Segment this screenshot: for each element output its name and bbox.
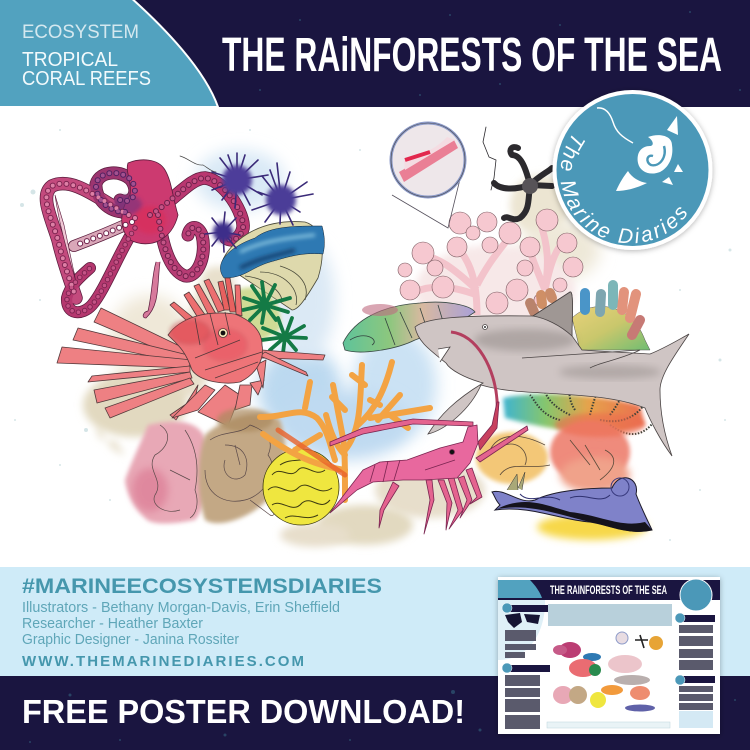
illustration: green anemones bbox=[236, 282, 306, 353]
tab text: ecosystem: ECOSYSTEM bbox=[22, 21, 139, 43]
light blue credits band bbox=[0, 567, 750, 677]
speckle texture bbox=[14, 129, 732, 541]
logo badge bbox=[549, 90, 716, 254]
credits: Researcher - Heather Baxter bbox=[22, 615, 203, 632]
bottom band bbox=[0, 676, 750, 750]
credits bbox=[22, 599, 340, 648]
illustration: giant clam bbox=[220, 222, 324, 310]
illustration: octopus bbox=[46, 160, 243, 318]
thumbnail world map bbox=[505, 613, 540, 628]
illustration: orange branch coral bbox=[260, 362, 430, 500]
illustration: coral polyp zoom inset bbox=[391, 123, 465, 228]
thumbnail tab bbox=[498, 580, 542, 598]
hashtag: #MARINEECOSYSTEMSDIARIES bbox=[22, 574, 382, 598]
poster thumbnail bbox=[498, 577, 720, 734]
logo badge: The Marine Diaries bbox=[560, 136, 687, 244]
illustration: yellow brain coral bbox=[263, 449, 339, 525]
thumbnail right text bbox=[679, 625, 713, 710]
thumbnail mini illustration bbox=[553, 632, 663, 712]
illustration: sea urchins bbox=[180, 153, 313, 252]
illustration: rainbow wash and feather star bbox=[503, 372, 655, 434]
logo manta icon bbox=[597, 108, 683, 191]
logo wordmark bbox=[560, 132, 696, 243]
illustration: pink lobster bbox=[330, 402, 528, 534]
thumbnail heading icons bbox=[502, 603, 685, 685]
thumbnail header bbox=[498, 580, 720, 600]
header corner tab bbox=[0, 0, 218, 107]
illustration: reef shark bbox=[415, 292, 689, 456]
illustration: watercolor washes bbox=[83, 150, 647, 547]
thumbnail left text bbox=[505, 630, 540, 729]
thumbnail intro text bbox=[548, 604, 672, 626]
illustration: sea slug nudibranch bbox=[492, 472, 652, 532]
thumbnail headings bbox=[507, 605, 715, 683]
illustration: orange and red reef corals bbox=[476, 413, 645, 493]
thumbnail title: THE RAINFORESTS OF THE SEA bbox=[550, 585, 667, 597]
header band bbox=[0, 0, 750, 107]
website: WWW.THEMARINEDIARIES.COM bbox=[22, 653, 304, 670]
illustration: lionfish bbox=[57, 278, 325, 426]
thumbnail note box bbox=[679, 711, 713, 728]
thumbnail footer box bbox=[547, 722, 670, 728]
illustration: brittle star bbox=[483, 127, 552, 219]
credits: Graphic Designer - Janina Rossiter bbox=[22, 631, 239, 648]
tab text: tropical coral reefs: CORAL REEFS bbox=[22, 68, 151, 90]
illustration: parrot fish bbox=[343, 302, 475, 352]
illustration: pink soft coral bbox=[398, 209, 583, 335]
thumbnail left column wash bbox=[498, 600, 545, 660]
illustration: tube coral bbox=[530, 285, 650, 350]
thumbnail logo bbox=[680, 579, 712, 611]
tab text: tropical coral reefs: TROPICAL bbox=[22, 49, 118, 71]
credits: Illustrators - Bethany Morgan-Davis, Erin Sheffield bbox=[22, 599, 340, 616]
tab text: tropical coral reefs bbox=[22, 49, 151, 90]
illustration: pink and brown corals bbox=[125, 408, 285, 524]
free poster download call to action: FREE POSTER DOWNLOAD! bbox=[22, 693, 465, 730]
